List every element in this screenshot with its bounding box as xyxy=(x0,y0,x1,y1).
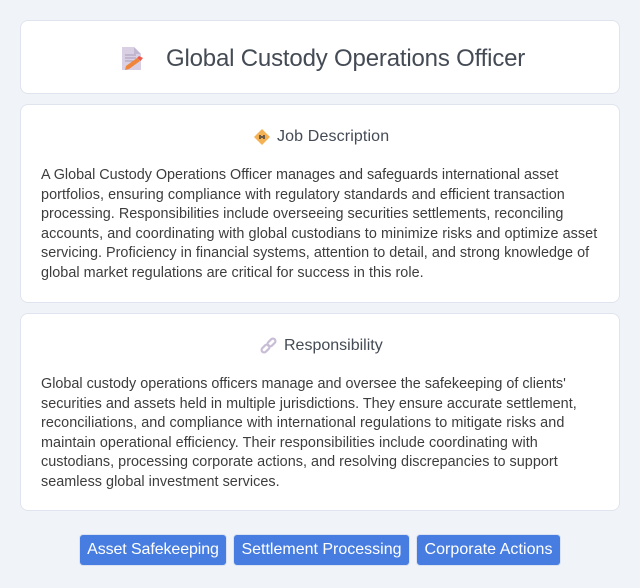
text: job description: accounts, and coordinating with global custodians to minimize risks and optimize asset xyxy=(41,226,597,242)
text: job description xyxy=(41,167,598,281)
text: job description: portfolios, ensuring compliance with regulatory standards and efficient transaction xyxy=(41,187,565,203)
heading: job description: Job Description xyxy=(277,128,389,145)
tag: settlement processing xyxy=(233,534,410,566)
text: responsibility: reconciliations, and compliance with international regulations to mitigate risks and xyxy=(41,415,564,431)
text: responsibility: Global custody operations officers manage and oversee the safekeeping of clients' xyxy=(41,376,566,392)
text: responsibility: securities and assets held in multiple jurisdictions. They ensure accurate settlement, xyxy=(41,396,577,412)
tag: asset safekeeping xyxy=(79,534,227,566)
icon: chain link xyxy=(260,338,276,354)
text: responsibility xyxy=(41,376,577,490)
text: job description: processing. Responsibilities include overseeing securities settlements, reconciling xyxy=(41,206,563,222)
tag: corporate actions: Corporate Actions xyxy=(424,541,553,558)
icon: document with pencil xyxy=(122,47,143,70)
text: responsibility: seamless global investment services. xyxy=(41,474,280,490)
text: job description: global market regulations are critical for success in this role. xyxy=(41,265,424,281)
text: job description: A Global Custody Operations Officer manages and safeguards international asset xyxy=(41,167,558,183)
icon: puzzle diamond xyxy=(254,129,270,145)
panel: responsibility xyxy=(20,313,620,511)
text: job description: servicing. Proficiency in financial systems, attention to detail, and strong knowledge of xyxy=(41,245,589,261)
tag: settlement processing: Settlement Processing xyxy=(241,541,402,558)
tag: asset safekeeping: Asset Safekeeping xyxy=(87,541,219,558)
panel: title xyxy=(20,20,620,94)
tag: corporate actions xyxy=(416,534,561,566)
panel: job description xyxy=(20,104,620,303)
heading: responsibility: Responsibility xyxy=(284,337,383,354)
title: Global Custody Operations Officer xyxy=(166,45,525,72)
text: responsibility: custodians, processing corporate actions, and resolving discrepancies to support xyxy=(41,454,558,470)
text: responsibility: maintain operational efficiency. Their responsibilities include coordinating with xyxy=(41,435,538,451)
